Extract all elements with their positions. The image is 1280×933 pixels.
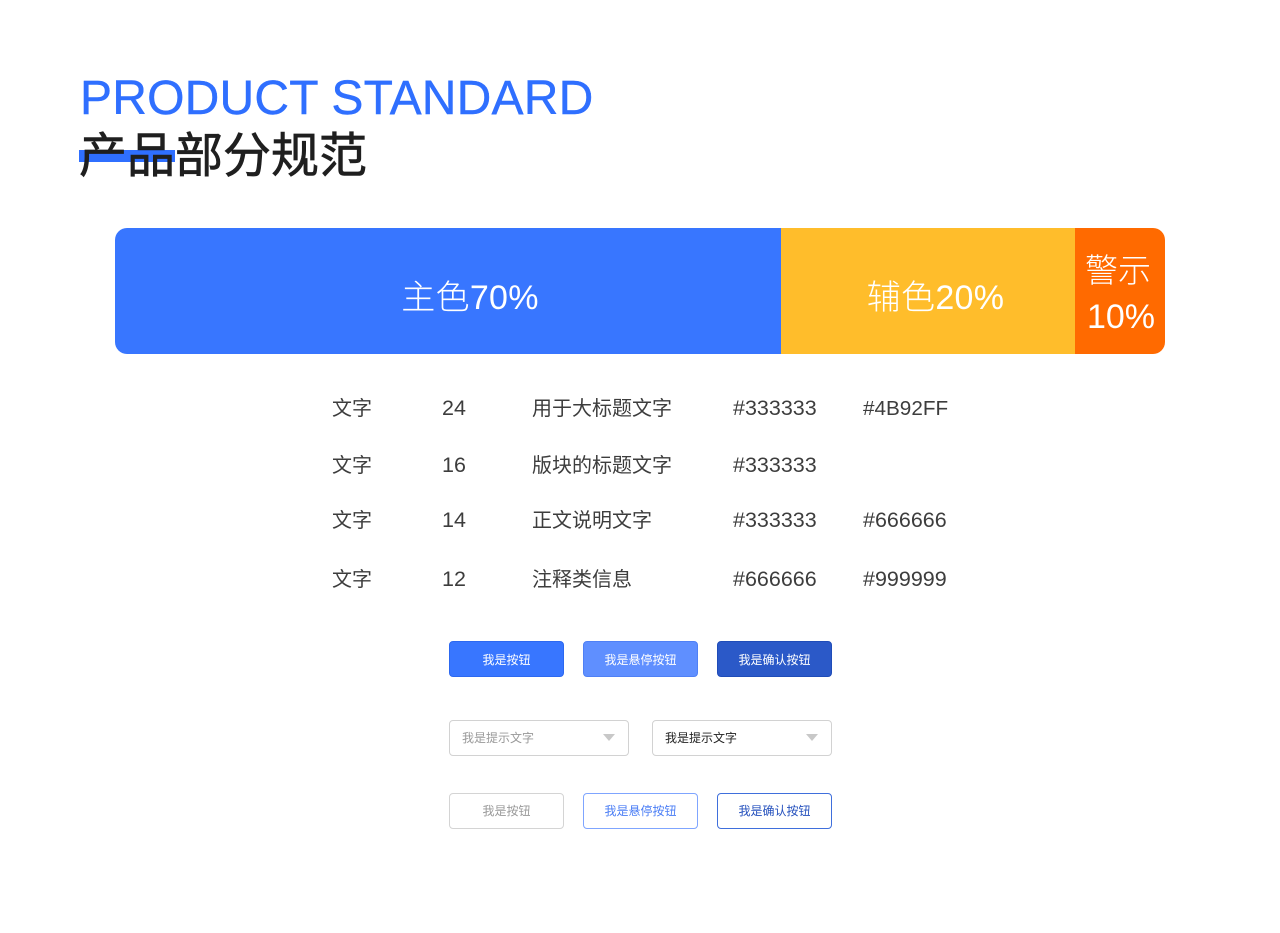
- row: 12: 12: [442, 567, 466, 591]
- row: 24: 用于大标题文字: [532, 398, 672, 420]
- button: primary hover: 我是悬停按钮: [604, 653, 676, 667]
- segment: primary 70%: [115, 228, 781, 354]
- icon: dropdown arrow: [806, 734, 818, 741]
- row: 12: 注释类信息: [532, 569, 632, 591]
- segment: secondary 20%: 辅色20%: [867, 279, 1004, 317]
- row: 16: 文字: [332, 455, 372, 477]
- button: outline default: [449, 793, 564, 829]
- title: Chinese heading: 产品部分规范: [79, 130, 367, 183]
- select: filled: [652, 720, 832, 756]
- typography table: [332, 396, 948, 591]
- icon: dropdown arrow: [603, 734, 615, 741]
- row: 24: #4B92FF: [863, 397, 948, 420]
- row: 24: 文字: [332, 398, 372, 420]
- select: filled: 我是提示文字: [665, 731, 737, 745]
- row: 24: 24: [442, 396, 466, 420]
- button: outline default: 我是按钮: [482, 804, 530, 818]
- row: 24: [332, 396, 948, 420]
- row: 16: [332, 453, 817, 477]
- segment: warning 10%: 警示: [1085, 252, 1151, 289]
- select: placeholder: 我是提示文字: [462, 731, 534, 745]
- row: 14: 14: [442, 508, 466, 532]
- color proportion bar: [115, 228, 1165, 354]
- row: 14: 文字: [332, 510, 372, 532]
- button: outline confirm: [717, 793, 832, 829]
- button: outline hover: [583, 793, 698, 829]
- button: primary default: [449, 641, 564, 677]
- row: 14: #666666: [863, 508, 947, 532]
- row: 12: #666666: [733, 567, 817, 591]
- row: 14: [332, 508, 947, 532]
- button: outline confirm: 我是确认按钮: [738, 804, 810, 818]
- button: primary confirm: 我是确认按钮: [738, 653, 810, 667]
- select: placeholder: [449, 720, 629, 756]
- row: 16: 16: [442, 453, 466, 477]
- button: primary hover: [583, 641, 698, 677]
- row: 12: #999999: [863, 567, 947, 591]
- row: 12: [332, 567, 947, 591]
- segment: primary 70%: 主色70%: [401, 279, 539, 317]
- button: primary confirm: [717, 641, 832, 677]
- row: 14: 正文说明文字: [532, 510, 652, 532]
- segment: secondary 20%: [781, 228, 1075, 354]
- row: 24: #333333: [733, 396, 817, 420]
- button: primary default: 我是按钮: [482, 653, 530, 667]
- button: outline hover: 我是悬停按钮: [604, 804, 676, 818]
- title: accent bar: [79, 150, 175, 162]
- row: 16: 版块的标题文字: [532, 455, 672, 477]
- row: 12: 文字: [332, 569, 372, 591]
- segment: warning 10%: [1075, 228, 1165, 354]
- row: 16: #333333: [733, 453, 817, 477]
- row: 14: #333333: [733, 508, 817, 532]
- title: English heading: PRODUCT STANDARD: [80, 72, 593, 125]
- segment: warning 10%: 10%: [1087, 298, 1155, 336]
